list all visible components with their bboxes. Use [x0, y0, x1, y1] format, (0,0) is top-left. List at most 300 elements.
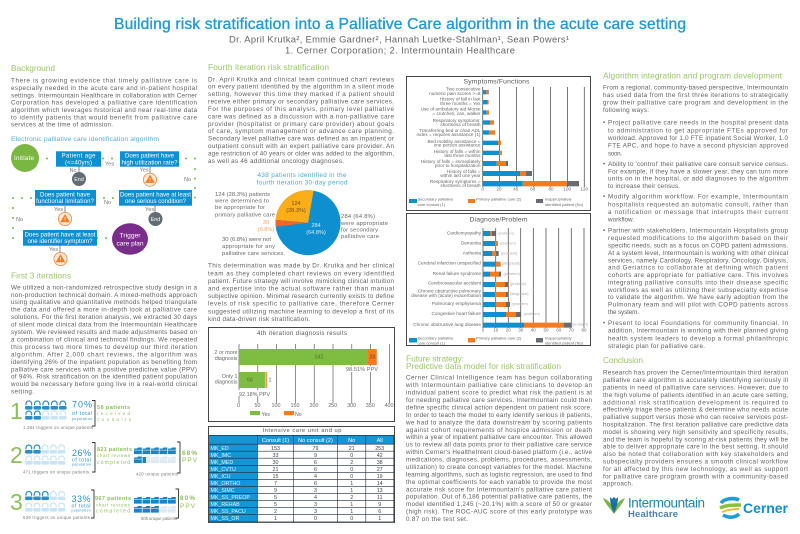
iteration 3: PPV [180, 503, 196, 510]
column: no: 1 [350, 488, 353, 494]
row labels: MK_ORTHO [210, 481, 240, 487]
text: conclusion: palliative support versus those who can receive services post- [603, 414, 788, 421]
category labels: diagnosis [215, 380, 238, 386]
bar chart: diagnosis results: 342 [314, 354, 324, 360]
text: determination: suggested utilizing machine learning to develop a first of its [208, 308, 394, 315]
category labels: Only 1 [222, 374, 238, 380]
problem tags: (problem) [501, 252, 518, 256]
logo: Intermountain Healthcare: Intermountain [628, 496, 705, 510]
axis labels: 250 [328, 403, 337, 409]
row labels: Renal failure syndrome [433, 271, 481, 276]
pie chart: 124 [291, 201, 301, 207]
box: high utilization: Does patient have [125, 153, 175, 160]
text: conclusion: model is showing very high sensitivity and specificity results, [603, 429, 788, 436]
iteration 2: 68% [182, 450, 197, 457]
text: determination: This determination was made by Dr. Krutka and her clinical [208, 263, 394, 270]
pie chart: (6.8%) [258, 227, 274, 233]
bullet list [603, 120, 788, 350]
text: background: to identify patients that would benefit from palliative care [11, 114, 197, 121]
iteration 2: chart reviews [97, 453, 131, 458]
bullet list: to validate the algorithm. We have early adoption from the [608, 294, 788, 301]
text: future strategy: define specific clinical action dependent on patient risk score. [406, 404, 592, 412]
heading: future strategy [406, 353, 561, 371]
grid [483, 87, 584, 187]
axis labels: 50 [543, 328, 549, 332]
column: no consult: 9 [314, 453, 317, 459]
pie labels: primary palliative care [215, 212, 275, 218]
legend: Primary palliative care (2) [476, 336, 522, 340]
text: future strategy: population. Out of 6,186 potential palliative care patients, the [406, 494, 592, 501]
axis labels: 80 [581, 328, 587, 332]
problem tags [498, 232, 589, 326]
problem tags: (problem) [504, 272, 520, 276]
column: no: 0 [350, 516, 353, 522]
iteration 3: 505 unique patients [141, 516, 177, 521]
pie labels: for secondary [341, 228, 378, 234]
bullet list: Project palliative care needs in the hospital present data [608, 120, 788, 127]
bars [239, 349, 377, 388]
axis labels [481, 186, 589, 192]
bullet list: At a system level, Intermountain is working with other clinical [608, 250, 788, 257]
column: consult: 15 [272, 474, 278, 480]
iteration 1: 1 [10, 398, 23, 424]
legend: care consult (1) [418, 340, 446, 346]
column: consult: 21 [272, 467, 278, 473]
bullet list: FTE APC, and hope to have a second physician approved [608, 143, 788, 150]
table: intensive care unit: Intensive care unit and up [262, 428, 342, 434]
legend: Yes [262, 412, 270, 418]
text: future strategy: individual patient score to predict what risk the patient is at [406, 390, 592, 397]
legend: care consult (1) [418, 202, 446, 207]
pie labels: appropriate for any [222, 244, 275, 250]
heading: algorithm: Electronic palliative care identification algorithm [11, 136, 159, 143]
initiate: Initiate [14, 155, 34, 162]
box: serious condition [119, 190, 192, 206]
row labels: = crutches, can, walker [432, 111, 481, 116]
bullet list: Ability to 'control' their palliative care consult service census. [608, 161, 788, 168]
iteration 1: population [72, 417, 92, 421]
text: conclusion [603, 370, 788, 488]
chart: symptoms and functions: Symptoms/Functions [464, 78, 530, 86]
column: no: 1 [350, 509, 353, 515]
heading: future strategy: Future strategy: [406, 353, 464, 363]
yes and no labels: No [104, 200, 111, 206]
text: first 3 iterations: would be necessary before going live in a real-world clinical [10, 381, 197, 388]
text: future strategy: 0.87 on the test set. [406, 516, 468, 523]
chart: diagnose and problem: Diagnose/Problem [470, 216, 528, 224]
bullet list: • [603, 161, 605, 168]
trigger care plan [112, 223, 148, 255]
text: first 3 iterations: a combination of clinical and technical findings. We repeated [11, 336, 197, 344]
iteration 1: consults [97, 417, 132, 422]
pie caption [256, 172, 348, 186]
pie labels: 284 (64.8%) [341, 214, 375, 220]
bullet list: units on in the hospital, or add diagnoses to the algorithm [608, 176, 788, 183]
bullet list: workflows as well as utilizing their subspecialty expertise [607, 287, 788, 294]
text: fourth iteration: provider (hospitalist or primary care provider) about goals [208, 121, 394, 128]
chart: diagnose and problem [406, 214, 590, 346]
text: first 3 iterations: this process two more times to develop our third iteration [11, 344, 197, 351]
text: first 3 iterations: solutions. For the first iteration analysis, we extracted 30 days [11, 314, 197, 321]
text: fourth iteration: on every patient identified by the algorithm in a silent mode [208, 84, 394, 91]
axis labels: 0 [481, 186, 484, 192]
row labels: Bed mobility assistance = [427, 139, 481, 144]
bullet list: to administration to get appropriate FTEs approved for [608, 127, 788, 134]
bullet list: addition, Intermountain is working with their planned giving [608, 328, 788, 335]
text: first 3 iterations: non-production technical domain. A mixed-methods approach [11, 292, 197, 299]
text: future strategy: us to review all data points prior to their palliative care service [406, 442, 592, 449]
text: first 3 iterations [10, 284, 197, 396]
title: Building risk stratification into a Palliative Care algorithm in the acute care setting [114, 16, 686, 33]
box: patient age [56, 151, 101, 167]
bullet list: to increase their census. [608, 183, 680, 190]
heading: background: Background [11, 63, 55, 73]
legend [250, 411, 302, 418]
axis labels: 100 [564, 186, 572, 192]
text: fourth iteration: as well as 46 additional oncology diagnoses. [208, 158, 344, 165]
end circles: End [151, 217, 160, 223]
row labels: Respiratory symptoms = [430, 179, 481, 184]
pie caption: 438 patients identified in the [258, 172, 347, 179]
text: determination: and expertise into the actual software rather than manual [208, 286, 394, 292]
column: no consult: 79 [312, 446, 318, 452]
bullet list: workload. Approved for 1.0 FTE inpatient Social Worker, 1.0 [607, 135, 788, 142]
iteration 1: of total [72, 411, 92, 417]
bullet list: health system leaders to develop a formal philanthropic [608, 335, 788, 342]
pie chart: (28.3%) [286, 208, 306, 214]
text: program development intro: grow their palliative care program and development in the [603, 100, 788, 107]
iteration 2: of total [72, 458, 91, 464]
text: determination: levels of risk specific to palliative care, therefore Cerner [208, 301, 394, 308]
grid [483, 228, 584, 328]
text: first 3 iterations: palliative care services with a positive predictive value (PPV) [11, 366, 197, 373]
yes and no labels: Yes [54, 207, 63, 213]
row labels: Asthenia [463, 250, 481, 256]
column: consult: 9 [274, 488, 277, 494]
iteration 3: 3 [10, 489, 23, 515]
end circles [72, 172, 162, 226]
row labels: Cardiomyopathy [447, 230, 482, 236]
text: background: Corporation has developed a palliative care identification [11, 100, 197, 107]
row labels: Pulmonary emphysema [432, 301, 481, 306]
axis labels: 40 [531, 328, 536, 332]
yes and no labels: No [184, 177, 191, 183]
text: program development intro: following ways: [603, 107, 649, 114]
heading: conclusion: Conclusion [603, 355, 643, 365]
yes and no labels: Yes [140, 168, 149, 174]
table lines [209, 435, 394, 522]
problem tags: (diagnosis) [510, 292, 529, 296]
axis labels: 350 [366, 403, 375, 409]
row labels: Cerebral infarction unspecified [418, 260, 481, 266]
slice: secondary [276, 190, 340, 255]
logo: Intermountain Healthcare [603, 496, 705, 520]
bullet list: For example, if they have a slower year, they can turn more [608, 168, 788, 175]
people icons [25, 401, 67, 420]
text: conclusion: for palliative care program growth with a community-based [603, 473, 788, 480]
column: no consult: 3 [314, 509, 317, 515]
column: all [375, 446, 384, 522]
pie chart: 284 [311, 223, 321, 229]
column: no: 1 [350, 481, 353, 487]
column: no: 2 [350, 460, 353, 466]
iteration 1: 58 patients [97, 405, 130, 411]
bar chart: diagnosis results: 26 [370, 354, 376, 360]
column: no: 21 [349, 446, 355, 452]
heading: fourth iteration: Fourth iteration risk stratification [208, 62, 329, 72]
iteration 2: population [72, 462, 91, 466]
text: future strategy: utilization) to create concept variables for the model. Machine [406, 464, 592, 471]
axis labels: 50 [254, 403, 260, 409]
slice: primary [276, 190, 314, 223]
text: conclusion: subspecialty providers ensures a smooth clinical workflow [603, 458, 788, 466]
iteration 3: population [72, 508, 91, 512]
text: fourth iteration: of care, symptom management or advance care planning. [208, 128, 394, 135]
column: consult: 33 [272, 453, 278, 459]
row labels: History of fall in last [440, 97, 481, 102]
text: background: services at the time of admission. [11, 122, 113, 129]
bullet list: workflow. [607, 217, 634, 224]
bullet list: hospitalists requested an automatic consult, rather than [608, 201, 788, 208]
bar chart: diagnosis results: 92.18% PPV [239, 392, 270, 398]
text: fourth iteration: receive either primary or secondary palliative care services. [208, 99, 394, 106]
column: consult: 153 [271, 446, 280, 452]
axis labels: 40 [513, 186, 519, 192]
row labels: MK_SIMC [210, 488, 235, 494]
box: patient age: Patient age [62, 153, 96, 160]
text: program development intro: From a regional, community-based perspective, Intermountain [603, 85, 788, 92]
end circles: End [74, 177, 84, 183]
axis labels: 0 [482, 328, 485, 332]
legend: Inappropriately [545, 336, 571, 340]
iteration 3: 80% [180, 495, 195, 502]
axis labels: 20 [496, 186, 502, 192]
text: conclusion: for all affected by this new technology, as well as support [603, 466, 788, 473]
bullet list: Partner with stakeholders. Intermountain Hospitalists group [608, 228, 788, 235]
column: all: 9 [378, 502, 381, 508]
column: no consult: 3 [314, 502, 317, 508]
legend [409, 336, 584, 346]
bar chart: diagnosis results [208, 328, 394, 422]
axis labels: 100 [272, 403, 280, 409]
iteration 3: 33% [72, 494, 90, 504]
text: conclusion: additional risk stratification development is required to [603, 399, 788, 406]
pie labels: were appropriate [340, 221, 388, 227]
logo: Cerner: Cerner [743, 500, 789, 516]
iteration 1: 1,384 triggers on unique patients [23, 425, 93, 430]
text: future strategy [405, 375, 592, 523]
table header: Consult (1) [262, 438, 289, 444]
column: all: 253 [375, 446, 384, 452]
row labels: MK_SS_OR [210, 516, 240, 522]
column: consult: 1 [274, 516, 277, 522]
table header: All [377, 438, 383, 444]
slice: not appropriate [275, 220, 308, 227]
heading: first 3 iterations: First 3 iterations [11, 270, 71, 280]
box: patient age: (<=40yrs) [65, 159, 92, 166]
text: determination: patient. Future strategy will involve mimicking clinical intuition [208, 278, 394, 285]
text: background [11, 78, 197, 129]
category labels: diagnosis [215, 356, 238, 362]
text: future strategy: we had to analyze the data downstream by scoring patients [405, 419, 592, 426]
heading: algorithm integration: Algorithm integration and program development [603, 70, 783, 80]
iteration 3 [10, 489, 196, 521]
initiate [11, 144, 39, 172]
text: fourth iteration: outpatient consult with an expert palliative care provider. An [208, 143, 394, 150]
column: all: 27 [377, 467, 383, 473]
row labels [411, 230, 482, 327]
column: no consult: 4 [314, 495, 317, 501]
text: conclusion: approach. [603, 481, 633, 488]
text: future strategy: within Cerner's HealtheIntent cloud-based platform (i.e., active [405, 449, 592, 456]
text: background: There is growing evidence that timely palliative care is [11, 78, 197, 85]
row labels: Chronic obstructive lung disease [413, 322, 481, 327]
iteration 2: 821 patients [97, 447, 132, 453]
logo: Cerner [720, 499, 789, 517]
row labels: MK_MED [210, 460, 233, 466]
folder icons [134, 497, 176, 513]
iteration 2: PPV [182, 457, 198, 464]
legend [409, 196, 584, 207]
row labels [417, 86, 481, 188]
text: future strategy: Cerner Clinical Intelligence team has begun collaborating [406, 375, 592, 382]
row labels: MK_SS_PREOP [210, 495, 250, 501]
column: all: 13 [377, 488, 383, 494]
column: no consult [312, 446, 318, 522]
text: fourth iteration: Secondary level palliative care was defined as an inpatient or [208, 136, 394, 143]
column: no consult: 4 [314, 474, 317, 480]
text: determination: subjective opinion. Minimal research currently exists to define [208, 293, 394, 300]
row labels: Two consecutive [446, 86, 481, 92]
row labels: Chronic obstructive pulmonary [418, 288, 482, 294]
iteration 2 [10, 442, 198, 476]
box: serious condition: one serious condition? [125, 198, 187, 205]
text: program development intro [603, 85, 789, 114]
column: consult: 7 [274, 481, 277, 487]
text: first 3 iterations: algorithm. After 2,000 chart reviews, the algorithm was [11, 351, 197, 358]
legend: Secondary palliative [418, 196, 454, 202]
legend: identified patient (No) [545, 340, 584, 346]
column: consult: 5 [274, 502, 277, 508]
text: determination: team as they completed chart reviews on every identified [208, 270, 394, 277]
box: identifier symptom: Does patient have at least [24, 231, 96, 238]
chart: symptoms and functions [406, 76, 590, 210]
row labels: MK_IMC [210, 453, 231, 459]
warning icons [54, 173, 157, 266]
text: conclusion: patients in need of palliative care services. However, due to [603, 384, 788, 392]
bullet list: • [603, 120, 605, 127]
text: conclusion: also be noted that collaboration with key stakeholders and [603, 451, 788, 458]
text: conclusion: the high volume of patients identified in an acute care setting, [603, 392, 788, 399]
box: identifier symptom: one identifier symptom? [28, 238, 93, 245]
axis labels: 70 [569, 328, 574, 332]
trigger care plan: Trigger [120, 232, 141, 240]
pie chart [258, 190, 340, 255]
bar chart: diagnosis results: 1 [268, 378, 272, 384]
flowchart [11, 144, 196, 266]
icon: Intermountain mark [603, 497, 625, 514]
pie chart: 30 [263, 220, 269, 226]
text: fourth iteration: Dr. April Krutka and clinical team continued chart reviews [208, 76, 394, 83]
iteration 2: 471 triggers on unique patients [23, 470, 89, 474]
bullet list: integrating palliative consults into their disease specific [608, 279, 788, 286]
iteration 2: 26% [72, 448, 91, 458]
column: all: 6 [378, 509, 381, 515]
column: all: 19 [377, 474, 383, 480]
text: first 3 iterations: We utilized a non-randomized retrospective study design in a [11, 284, 197, 291]
iteration 3: 967 patients [95, 496, 131, 502]
row labels: Use of ambulatory aid Morse [421, 106, 481, 112]
iteration 1: received [97, 411, 130, 416]
text: future strategy: accurate risk score for Intermountain's palliative care patient [406, 486, 592, 493]
problem tags: (problem) [524, 312, 540, 316]
axis labels: 400 [384, 403, 394, 409]
column: all: 11 [377, 495, 383, 501]
column: no: 1 [350, 502, 353, 508]
text: background: algorithm which leverages historical and near real-time data [11, 107, 197, 114]
bullet list: • [603, 320, 605, 327]
box: serious condition: Does patient have at least [120, 191, 191, 198]
row labels: three months = Yes [440, 101, 481, 106]
problem tags: (problem) [510, 282, 527, 286]
column: no consult: 6 [314, 467, 317, 473]
pie labels: be appropriate for [215, 205, 265, 211]
text: future strategy: for needing palliative care services. Intermountain could then [406, 397, 592, 404]
text: fourth iteration: For the purposes of this analysis, primary level palliative [208, 106, 394, 113]
iteration 1 [10, 398, 132, 430]
row labels: History of falls = within [434, 149, 481, 154]
bullet list: cohorts are appropriate for palliative care. This involves [608, 272, 788, 279]
pie labels [214, 192, 388, 257]
column: no: 0 [350, 474, 353, 480]
row labels: index = requires assistance (1) [417, 132, 481, 137]
bars [483, 231, 572, 328]
yes and no labels: No [70, 168, 77, 174]
bullet list: Modify algorithm workflow. For example, Intermountain [608, 194, 788, 201]
column: no: 2 [350, 495, 353, 501]
column: no consult: 6 [314, 481, 317, 487]
text: first 3 iterations: the data and offered a more in-depth look at palliative care [11, 307, 197, 314]
pie chart: (64.8%) [306, 230, 326, 236]
connector dots [12, 158, 196, 239]
text: conclusion: palliative care algorithm is accurately identifying seriously ill [603, 377, 788, 384]
text: determination: kind data-driven risk stratification. [208, 316, 310, 323]
text: future strategy: the optimal coefficients for each variable to provide the most [406, 479, 592, 486]
axis labels: 150 [290, 403, 300, 409]
table header: No consult (2) [298, 438, 333, 444]
column: all: 42 [377, 453, 383, 459]
text: future strategy: with Intermountain palliative care clinicians to develop an [405, 382, 592, 389]
axis labels: 10 [493, 328, 499, 332]
box: functional limitation: functional limitation? [36, 198, 95, 205]
legend: Primary palliative care (2) [476, 196, 522, 202]
column: consult: 30 [272, 460, 278, 466]
row labels: Congestive heart failure [431, 311, 481, 316]
axis labels: 20 [506, 328, 511, 332]
row labels: History of falls = immediately [421, 159, 481, 164]
axis labels: 60 [556, 328, 562, 332]
column: consult [271, 446, 280, 522]
column: consult: 5 [274, 495, 277, 501]
bullet list: specific needs, such as a focus on COPD patient admissions. [608, 242, 788, 250]
axis labels: 30 [518, 328, 524, 332]
text: first 3 iterations: of silent mode clinical data from the Intermountain Healthcare [11, 322, 197, 329]
category labels [214, 350, 238, 386]
legend: identified patient (No) [545, 202, 584, 207]
bullet list: Present to local Foundations for community financial. In [608, 320, 788, 327]
bullet list: the system. [608, 309, 639, 316]
authors: Dr. April Krutka², Emmie Gardner², Hannah Luetke-Stahlman¹, Sean Powers¹ [229, 34, 569, 44]
